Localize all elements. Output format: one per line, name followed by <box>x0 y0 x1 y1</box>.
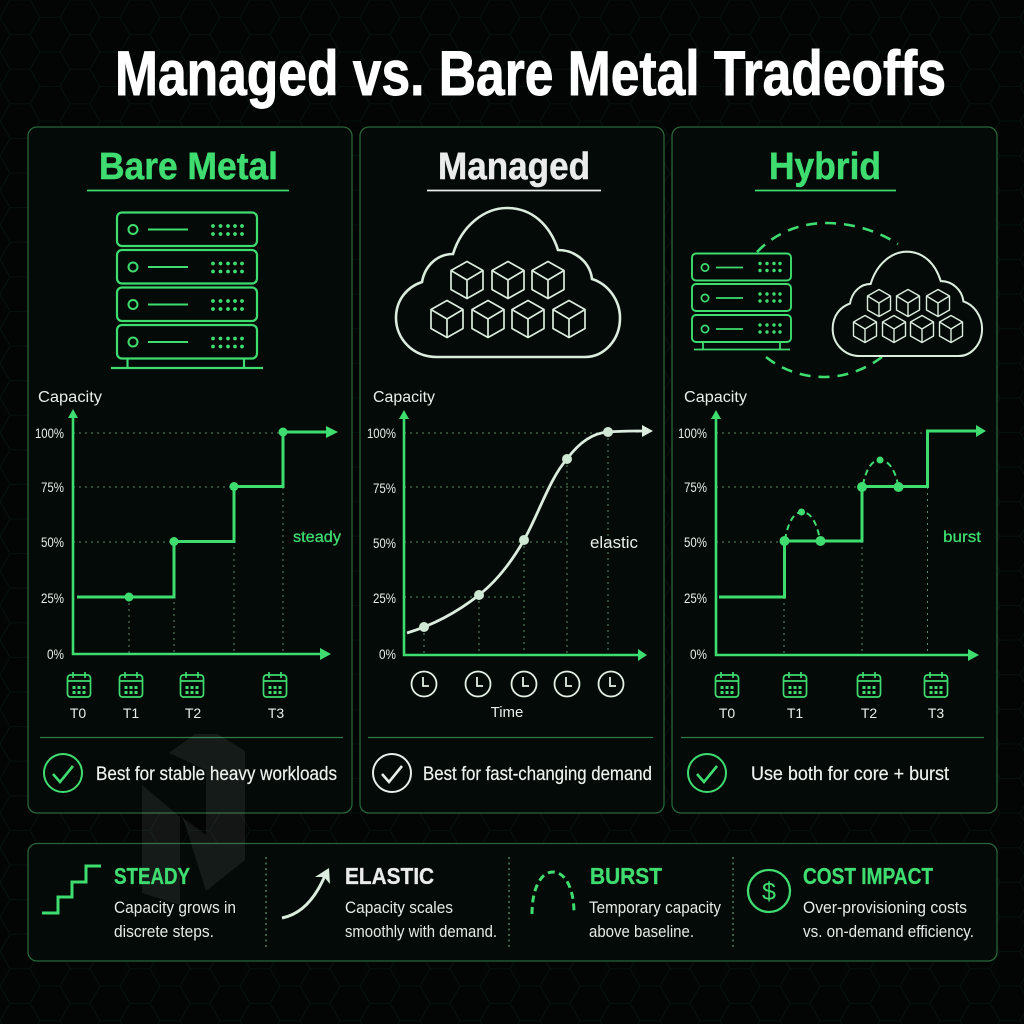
line chart: elastic capacity: 25% <box>373 591 396 606</box>
legend: burst <box>532 863 721 941</box>
line chart: steady capacity: 25% <box>41 591 64 606</box>
legend: burst: above baseline. <box>589 922 694 941</box>
line chart: elastic capacity: elastic <box>590 534 638 552</box>
line chart: burst capacity: 50% <box>684 535 707 550</box>
legend panel <box>28 734 997 961</box>
legend: burst: BURST <box>590 863 662 889</box>
callout: best for stable <box>44 754 337 792</box>
callout: use both <box>688 754 950 792</box>
time axis icons: T2 <box>185 705 201 721</box>
icon: server rack <box>111 212 263 368</box>
legend: cost impact: COST IMPACT <box>803 863 933 889</box>
line chart: elastic capacity: 50% <box>373 536 396 551</box>
legend: burst: Temporary capacity <box>589 898 721 917</box>
time axis icons: T1 <box>787 705 803 721</box>
legend: cost impact <box>748 863 974 941</box>
panel: bare metal <box>28 127 352 813</box>
legend: elastic <box>282 863 497 941</box>
legend: cost impact: $ <box>762 878 776 906</box>
line chart: steady capacity <box>35 389 341 662</box>
legend: steady: Capacity grows in <box>114 898 236 917</box>
line chart: steady capacity: steady <box>293 529 341 546</box>
time axis icons: Time <box>491 704 523 721</box>
watermark logo <box>142 734 245 905</box>
callout: best for fast-changing <box>373 754 652 792</box>
line chart: burst capacity: 75% <box>684 480 707 495</box>
time axis icons: T0 <box>719 705 735 721</box>
legend: elastic: ELASTIC <box>345 863 434 889</box>
line chart: steady capacity: 0% <box>47 647 64 662</box>
callout: best for stable: Best for stable heavy workloads <box>96 763 337 785</box>
line chart: burst capacity <box>678 389 986 662</box>
heading: bare metal: Bare Metal <box>99 146 278 188</box>
line chart: burst capacity: 25% <box>684 591 707 606</box>
line chart: burst capacity: 0% <box>690 647 707 662</box>
icon: server and cloud linked by dashed arcs <box>692 223 982 377</box>
line chart: burst capacity: Capacity <box>684 389 747 406</box>
line chart: elastic capacity: 0% <box>379 647 396 662</box>
callout: best for fast-changing: Best for fast-changing demand <box>423 763 652 785</box>
panel: hybrid <box>672 127 997 813</box>
time axis icons <box>68 672 286 721</box>
legend: cost impact: Over-provisioning costs <box>803 898 967 917</box>
line chart: burst capacity: 100% <box>678 426 707 441</box>
heading: managed: Managed <box>438 146 590 188</box>
line chart: steady capacity: 75% <box>41 480 64 495</box>
line chart: steady capacity: 100% <box>35 426 64 441</box>
legend: elastic: smoothly with demand. <box>345 922 497 941</box>
line chart: steady capacity: Capacity <box>38 389 102 406</box>
panel: managed <box>360 127 664 813</box>
legend: steady <box>42 863 236 941</box>
time axis icons <box>412 672 624 721</box>
legend: steady: discrete steps. <box>114 922 214 941</box>
line chart: burst capacity: burst <box>943 529 982 546</box>
legend: elastic: Capacity scales <box>345 898 453 917</box>
time axis icons: T0 <box>70 705 86 721</box>
legend: cost impact: vs. on-demand efficiency. <box>803 922 974 941</box>
line chart: elastic capacity <box>367 389 653 662</box>
line chart: elastic capacity: 75% <box>373 481 396 496</box>
line chart: elastic capacity: Capacity <box>373 389 435 406</box>
time axis icons <box>716 672 948 721</box>
time axis icons: T3 <box>928 705 944 721</box>
time axis icons: T2 <box>861 705 877 721</box>
line chart: steady capacity: 50% <box>41 535 64 550</box>
line chart: elastic capacity: 100% <box>367 426 396 441</box>
heading: hybrid: Hybrid <box>769 146 881 188</box>
time axis icons: T1 <box>123 705 139 721</box>
time axis icons: T3 <box>268 705 284 721</box>
legend: steady: STEADY <box>114 863 190 889</box>
callout: use both: Use both for core + burst <box>751 763 950 785</box>
icon: cloud with containers <box>396 208 620 357</box>
